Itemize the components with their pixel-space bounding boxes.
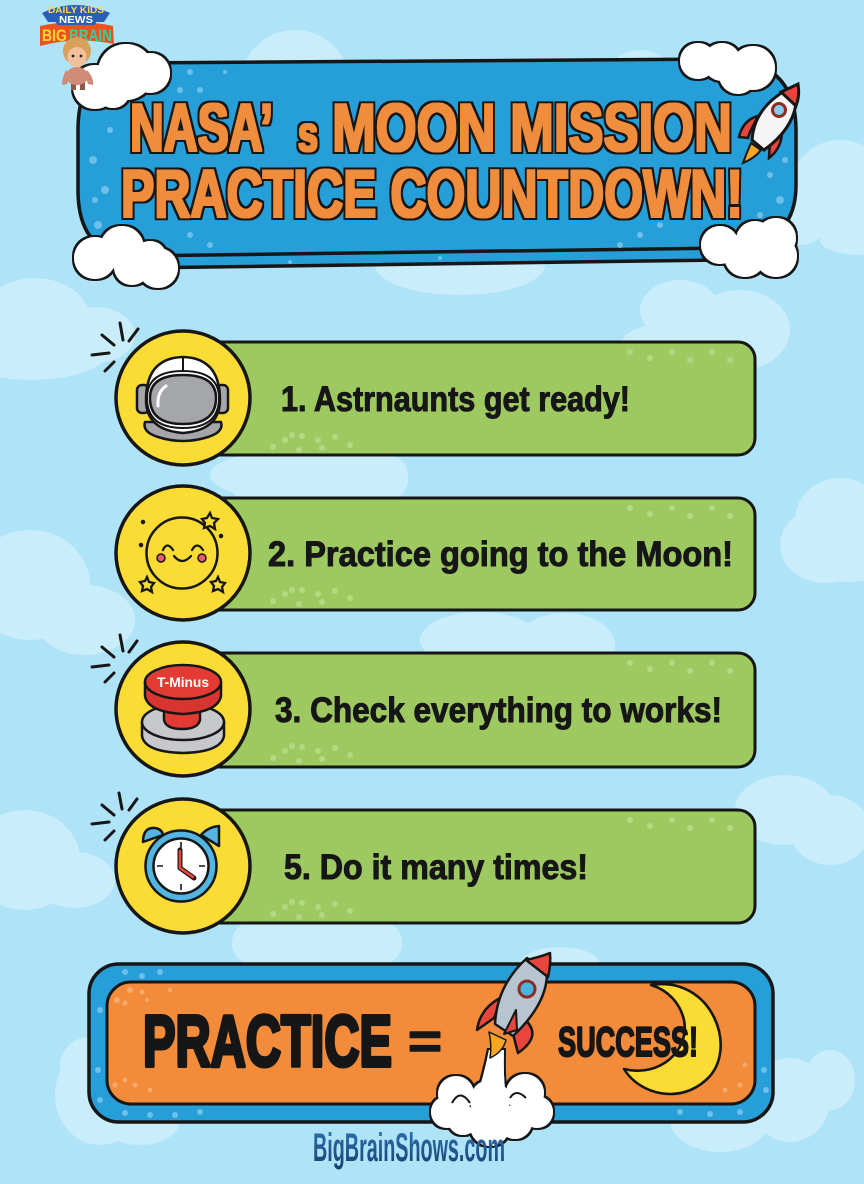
step 1 text: 1. Astrnaunts get ready! <box>281 380 630 419</box>
icon: banner rocket <box>739 84 799 163</box>
logo: Daily Kids News Big Brain <box>40 5 114 90</box>
practice equation text <box>143 1002 698 1082</box>
icon: crescent moon <box>624 984 721 1094</box>
icon: astronaut helmet <box>137 357 228 441</box>
burst lines <box>92 793 137 840</box>
title text: s <box>298 106 318 162</box>
step 2 text: 2. Practice going to the Moon! <box>268 535 733 574</box>
text: BigBrainShows.com <box>313 1126 505 1170</box>
step 4 badge <box>116 799 250 933</box>
title text <box>121 90 743 232</box>
icon: T-Minus button: T-Minus <box>157 674 209 690</box>
icon: launch rocket with cloud <box>431 953 553 1146</box>
banner clouds <box>73 43 797 288</box>
step 3 text: 3. Check everything to works! <box>275 691 722 730</box>
title banner <box>73 43 799 288</box>
burst lines <box>92 323 138 371</box>
step 3 <box>92 635 755 776</box>
burst lines <box>92 635 137 682</box>
bar: step 2 <box>200 498 755 610</box>
logo: Daily Kids News Big Brain: BRAIN <box>69 26 112 45</box>
logo: Daily Kids News Big Brain: NEWS <box>59 14 93 26</box>
step 1 <box>92 323 755 465</box>
bar: step 1 <box>200 342 755 455</box>
practice equation text: SUCCESS! <box>558 1018 698 1065</box>
step 2 badge <box>116 486 250 620</box>
bar: step 3 <box>200 653 755 767</box>
bottom panel <box>89 953 773 1146</box>
icon: T-Minus button <box>142 665 224 753</box>
practice equation text: = <box>408 1013 442 1069</box>
step 1 badge <box>116 331 250 465</box>
step 3 badge <box>116 642 250 776</box>
icon: smiling moon <box>140 513 225 592</box>
step 4 <box>92 793 755 933</box>
logo: Daily Kids News Big Brain: BIG <box>42 26 67 45</box>
step 4 text: 5. Do it many times! <box>284 848 588 887</box>
icon: alarm clock <box>143 826 219 902</box>
title text: NASA’ <box>130 90 273 166</box>
title text: MOON MISSION <box>332 90 732 166</box>
bar: step 4 <box>200 810 755 923</box>
practice equation text: PRACTICE <box>143 1002 392 1082</box>
step 2 <box>116 486 755 620</box>
character <box>62 37 93 90</box>
logo: Daily Kids News Big Brain: DAILY KIDS <box>48 5 104 15</box>
